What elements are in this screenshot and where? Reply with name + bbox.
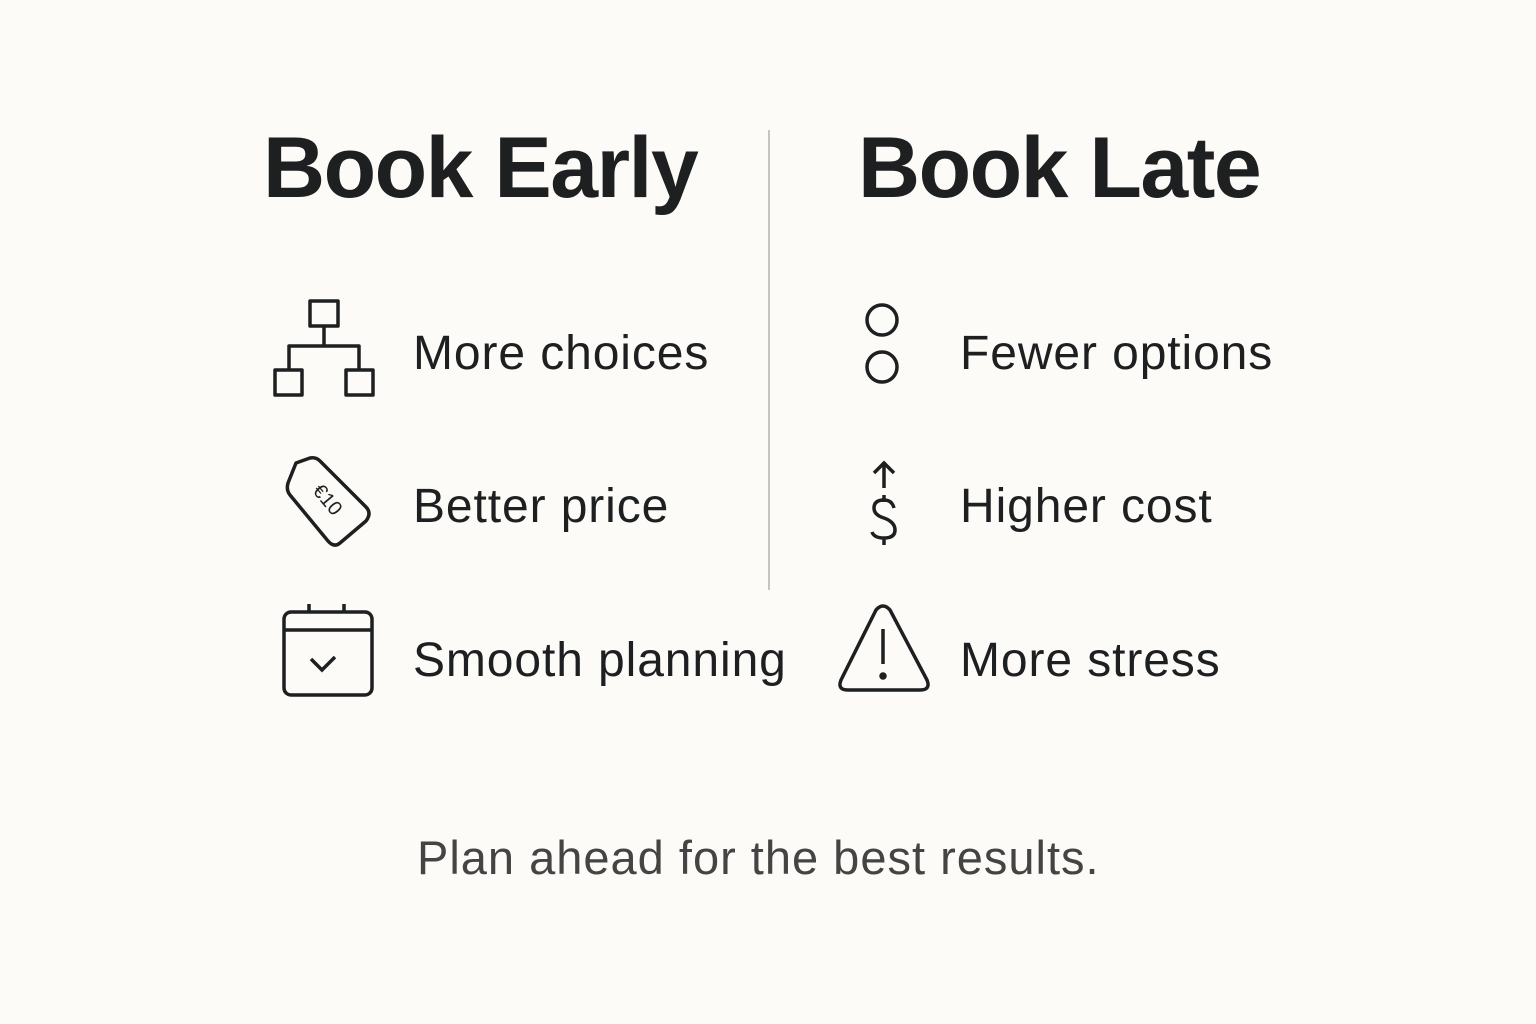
icon: price tag (286, 456, 371, 547)
icon: price tag: €10 (308, 480, 346, 520)
footer text: Plan ahead for the best results. (417, 831, 1100, 884)
icon: hierarchy (273, 299, 375, 397)
title: Book Late: Book Late (858, 120, 1260, 216)
icon: rising dollar (870, 460, 897, 545)
text: More stress: More stress (960, 634, 1221, 687)
text: Fewer options: Fewer options (960, 327, 1273, 380)
text: Better price: Better price (413, 480, 669, 533)
text: Higher cost: Higher cost (960, 480, 1213, 533)
icon: calendar (282, 604, 374, 697)
icon: two circles (865, 303, 899, 384)
divider (768, 130, 770, 590)
icon: warning triangle (838, 604, 930, 692)
text: Smooth planning: Smooth planning (413, 634, 787, 687)
text: More choices: More choices (413, 327, 709, 380)
title: Book Early: Book Early (263, 120, 697, 216)
